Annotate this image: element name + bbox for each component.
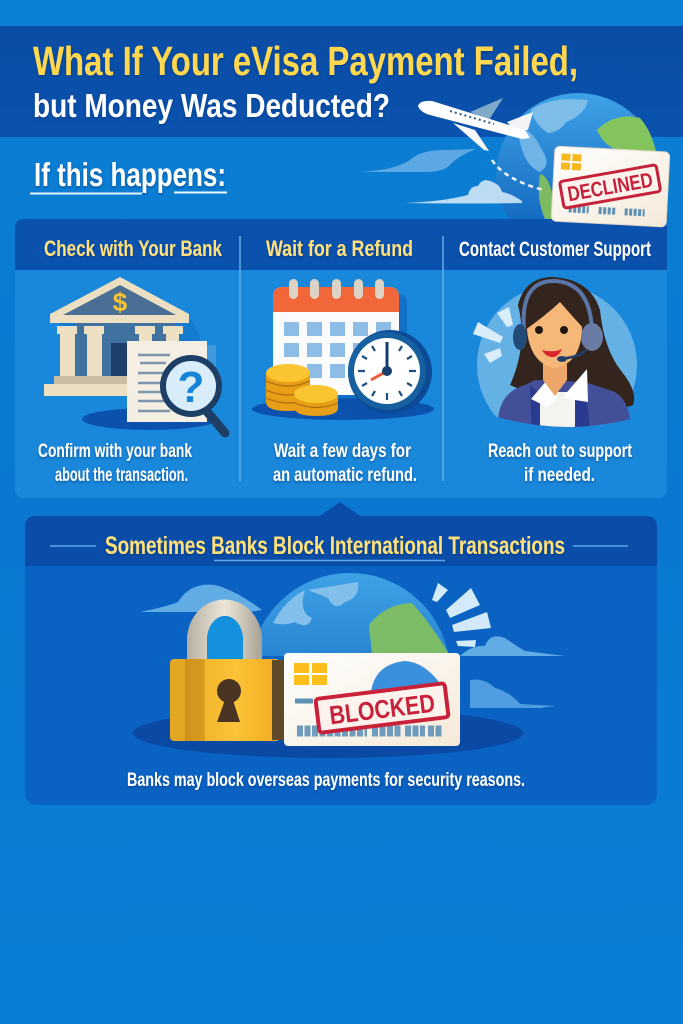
panel header <box>25 516 657 566</box>
cloud right <box>404 180 522 204</box>
ground shadow <box>133 708 523 758</box>
panel header <box>15 219 667 270</box>
text: reach out to support: Reach out to support <box>488 441 632 462</box>
text: security reasons: Banks may block overseas payments for security reasons. <box>127 770 525 791</box>
globe <box>260 573 448 656</box>
panel: banks block international transactions <box>25 502 657 805</box>
declined card <box>551 146 670 227</box>
heading: wait for a refund: Wait for a Refund <box>266 236 413 261</box>
icon: bank with document and magnifier: $ <box>113 287 128 317</box>
airplane <box>418 98 533 151</box>
coins <box>266 364 338 416</box>
icon: customer support agent <box>473 277 637 427</box>
panel: three steps <box>15 219 667 498</box>
illustration: lock, globe and blocked card <box>133 573 565 773</box>
globe <box>496 93 656 219</box>
text: confirm with your bank: about the transaction. <box>55 465 188 486</box>
title line 2: but Money Was Deducted? <box>33 87 390 124</box>
heading: check with your bank: Check with Your Bank <box>44 236 223 261</box>
text: confirm with your bank: Confirm with your bank <box>38 441 192 462</box>
text: wait a few days: Wait a few days for <box>274 441 411 462</box>
clouds <box>140 585 565 708</box>
text: wait a few days <box>273 441 417 486</box>
text: reach out to support <box>488 441 632 486</box>
blocked stamp: BLOCKED <box>328 688 437 730</box>
text: wait a few days: an automatic refund. <box>273 465 417 486</box>
illustration: globe and airplane <box>361 93 656 219</box>
alert rays <box>432 583 491 647</box>
subheading: if this happens: If this happens: <box>34 156 226 193</box>
panel body <box>15 219 667 498</box>
icon: bank with document and magnifier: ? <box>178 363 204 412</box>
cloud left <box>360 149 476 172</box>
title <box>33 38 578 124</box>
card number marks <box>569 209 645 213</box>
declined stamp: DECLINED <box>566 169 655 206</box>
icon: calendar, coins and clock <box>252 279 434 420</box>
padlock <box>170 599 288 741</box>
icon: bank with document and magnifier <box>44 277 225 433</box>
text: confirm with your bank <box>38 441 192 486</box>
blocked card <box>284 653 460 746</box>
clock <box>348 330 432 414</box>
text: reach out to support: if needed. <box>524 465 595 486</box>
panel body <box>25 516 657 805</box>
title banner <box>0 26 683 137</box>
chip <box>561 153 582 170</box>
connector arrow <box>318 502 362 517</box>
dashed flight path <box>492 160 544 190</box>
